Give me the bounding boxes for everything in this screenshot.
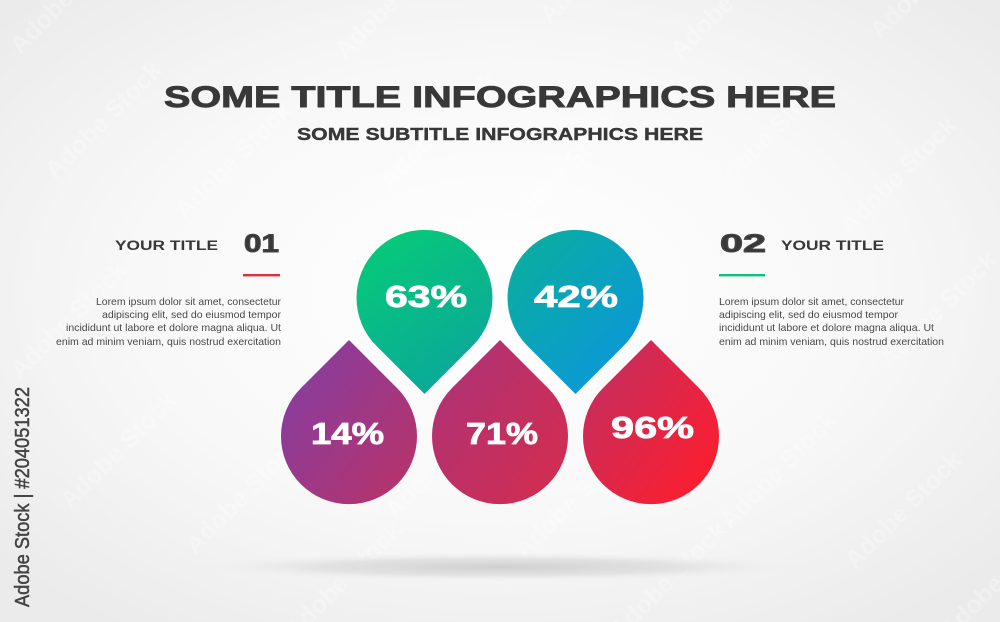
drop: 63%: 63% bbox=[385, 279, 467, 314]
body text left: incididunt ut labore et dolore magna aliqua. Ut bbox=[66, 322, 281, 334]
body text left: Lorem ipsum dolor sit amet, consectetur bbox=[96, 296, 281, 308]
accent line green bbox=[719, 274, 765, 276]
body text right: enim ad minim veniam, quis nostrud exercitation bbox=[719, 336, 944, 348]
watermark pattern: Adobe Stock bbox=[4, 256, 132, 384]
body text right: incididunt ut labore et dolore magna aliqua. Ut bbox=[719, 322, 934, 334]
floor shadow bbox=[200, 553, 800, 581]
subtitle: SOME SUBTITLE INFOGRAPHICS HERE bbox=[297, 124, 703, 144]
watermark pattern: Adobe Stock bbox=[374, 66, 502, 194]
drop: 96% bbox=[583, 340, 719, 504]
heading: your title 02: YOUR TITLE bbox=[781, 238, 884, 253]
watermark pattern: Adobe Stock bbox=[509, 436, 637, 564]
body text left: adipiscing elit, sed do eiusmod tempor bbox=[102, 309, 281, 321]
drop: 42% bbox=[508, 230, 644, 394]
watermark pattern: Adobe Stock bbox=[874, 246, 1000, 374]
watermark pattern: Adobe Stock bbox=[839, 446, 967, 574]
watermark pattern: Adobe Stock bbox=[39, 56, 167, 184]
panel: left item 01 bbox=[56, 230, 281, 348]
watermark pattern: Adobe Stock bbox=[499, 106, 627, 234]
drop: 71% bbox=[432, 340, 568, 504]
drop: 14%: 14% bbox=[311, 416, 384, 451]
body text right bbox=[719, 296, 944, 348]
watermark pattern: Adobe Stock bbox=[179, 431, 307, 559]
watermark pattern: Adobe Stock bbox=[834, 111, 962, 239]
watermark pattern: Adobe Stock bbox=[704, 71, 832, 199]
watermark pattern: Adobe Stock bbox=[379, 396, 507, 524]
stock credit: Adobe Stock | #204051322 bbox=[12, 387, 34, 607]
watermark pattern: Adobe Stock bbox=[714, 406, 842, 534]
body text left bbox=[56, 296, 281, 348]
drop: 96%: 96% bbox=[611, 410, 694, 445]
drop: 63% bbox=[357, 230, 492, 394]
drop: 71%: 71% bbox=[466, 416, 538, 451]
panel: right item 02 bbox=[719, 230, 944, 348]
drop: 14% bbox=[281, 340, 417, 504]
drop: 42%: 42% bbox=[534, 279, 618, 314]
body text left: enim ad minim veniam, quis nostrud exercitation bbox=[56, 336, 281, 348]
number 01: 01 bbox=[244, 230, 279, 258]
accent line red bbox=[243, 274, 280, 276]
watermark pattern: Adobe Stock bbox=[54, 386, 182, 514]
title: SOME TITLE INFOGRAPHICS HERE bbox=[164, 81, 836, 114]
watermark pattern: Adobe Stock bbox=[169, 96, 297, 224]
body text right: adipiscing elit, sed do eiusmod tempor bbox=[719, 309, 898, 321]
body text right: Lorem ipsum dolor sit amet, consectetur bbox=[719, 296, 904, 308]
number 02: 02 bbox=[720, 230, 766, 258]
heading: your title 01: YOUR TITLE bbox=[115, 238, 218, 253]
